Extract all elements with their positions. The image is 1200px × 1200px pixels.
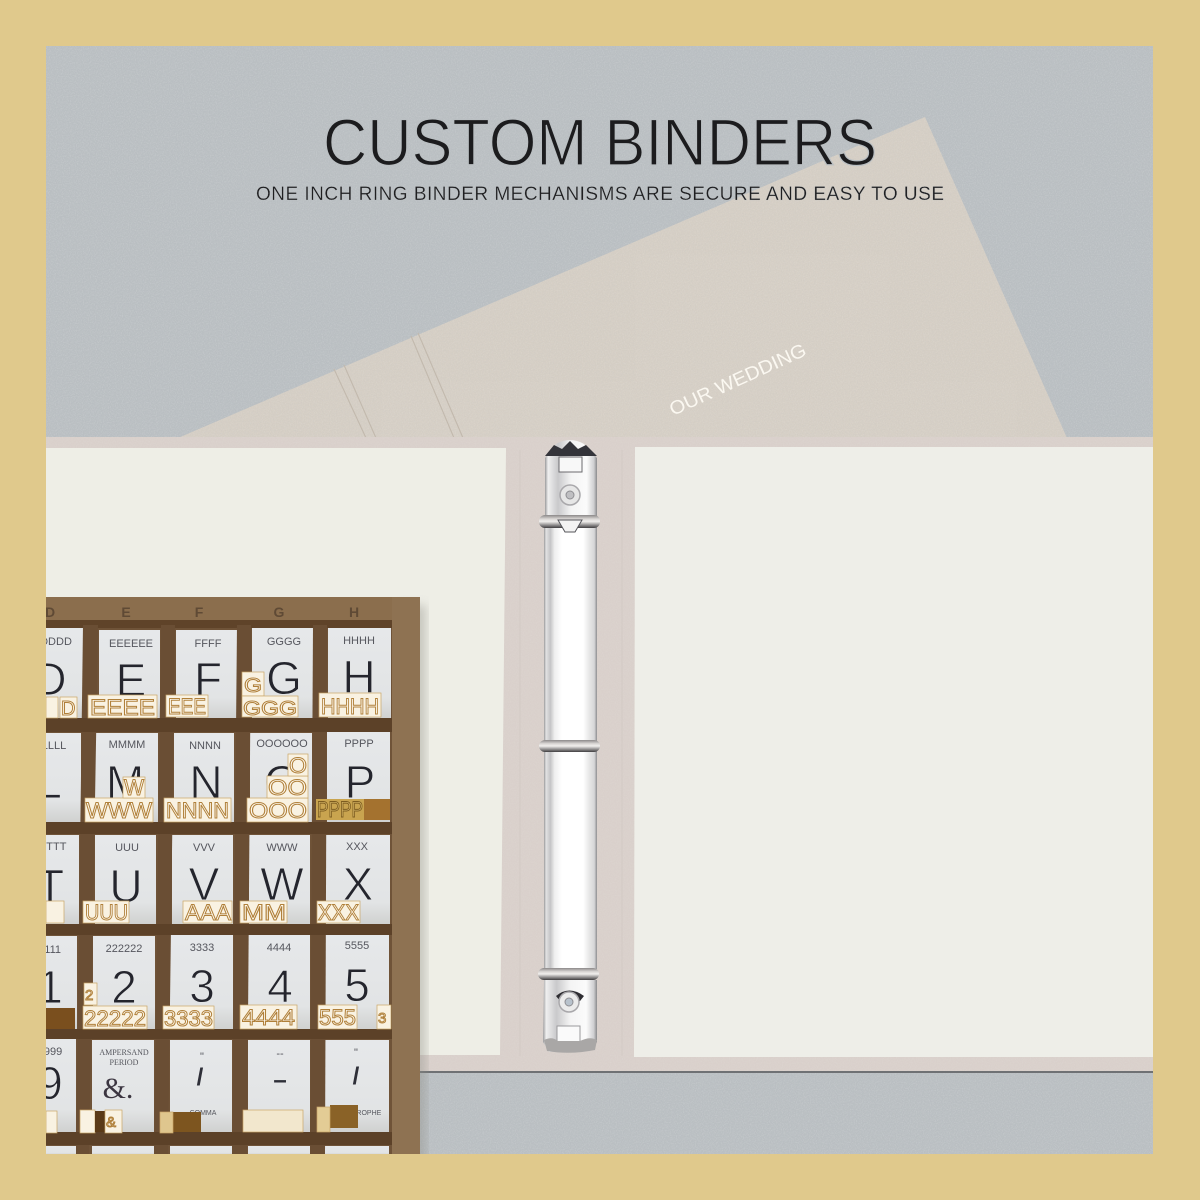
row 3 cells: T U V W X: V xyxy=(189,858,220,910)
top rail with column letters: H xyxy=(349,604,359,620)
row 2 cells: L M N O P: LLLL xyxy=(42,740,66,752)
row 2 cells: L M N O P: MMMM xyxy=(109,739,145,751)
row 4 cells: 1 2 3 4 5: 222222 xyxy=(106,943,142,955)
row 5 cells: 9 ampersand comma hyphen apostrophe: PERIOD xyxy=(110,1058,139,1067)
top rail with column letters: F xyxy=(195,604,204,620)
brass type: row 3: MM xyxy=(242,900,286,925)
row 4 cells: 1 2 3 4 5: 4444 xyxy=(267,942,291,954)
brass type: row 2: OOO xyxy=(249,798,307,823)
row 4 cells: 1 2 3 4 5: 3 xyxy=(189,960,215,1012)
row 3 cells: T U V W X: UUU xyxy=(115,842,139,854)
title: CUSTOM BINDERS xyxy=(323,105,877,179)
row 2 cells: L M N O P: OOOOOO xyxy=(256,738,308,750)
row 5 cells: 9 ampersand comma hyphen apostrophe: " xyxy=(200,1051,204,1063)
row 4 cells: 1 2 3 4 5: 2 xyxy=(111,961,137,1013)
row 1 cells: D E F G H: HHHH xyxy=(343,635,375,647)
row 1 cells: D E F G H: D xyxy=(33,653,67,705)
row 6 cell tops xyxy=(46,1146,389,1154)
row 5 cells: 9 ampersand comma hyphen apostrophe xyxy=(37,1039,389,1133)
brass type: row 4: 3333 xyxy=(164,1006,213,1031)
brass type: row 4 xyxy=(46,983,391,1031)
row 5 cells: 9 ampersand comma hyphen apostrophe: AMPERSAND xyxy=(99,1048,149,1057)
brass type: row 1: EEE xyxy=(168,694,206,719)
row 4 cells: 1 2 3 4 5: 5555 xyxy=(345,940,369,952)
row 3 cells: T U V W X: U xyxy=(109,860,143,912)
row 5 cells: 9 ampersand comma hyphen apostrophe: – xyxy=(273,1067,287,1094)
brass type: row 2: PPPP xyxy=(317,797,363,822)
right rail xyxy=(392,597,420,1157)
left page xyxy=(46,448,506,1055)
row 1 cells: D E F G H: EEEEEE xyxy=(109,638,153,650)
brass type: row 4: 22222 xyxy=(84,1006,146,1031)
row 3 cells: T U V W X xyxy=(36,835,390,925)
top rail with column letters: G xyxy=(274,604,285,620)
open binder linen cover xyxy=(46,437,1153,1073)
top rail with column letters: E xyxy=(121,604,131,620)
row 5 cells: 9 ampersand comma hyphen apostrophe: " xyxy=(354,1047,358,1059)
row 2 cells: L M N O P: NNNN xyxy=(189,740,221,752)
top ring xyxy=(539,515,600,528)
row 2 cells: L M N O P: PPPP xyxy=(344,738,374,750)
brass type: row 2: NNNN xyxy=(166,798,229,823)
brass type: row 4: 3 xyxy=(378,1010,386,1027)
brass type: row 2 xyxy=(85,753,390,823)
vertical dividers xyxy=(76,625,327,1154)
right page xyxy=(634,447,1153,1057)
row 4 cells: 1 2 3 4 5: 1111 xyxy=(39,944,61,956)
tray frame xyxy=(46,628,392,1154)
brass type: row 3: AAA xyxy=(185,900,231,925)
cover foil text: OUR WEDDING: OUR WEDDING xyxy=(666,340,810,421)
brass type: row 2: WWW xyxy=(86,798,152,823)
row 3 cells: T U V W X: WWW xyxy=(266,842,298,854)
wooden letterpress type tray xyxy=(33,597,420,1157)
row 4 cells: 1 2 3 4 5: 5 xyxy=(344,959,370,1011)
brass type: row 1: D xyxy=(61,698,75,720)
subtitle: ONE INCH RING BINDER MECHANISMS ARE SECURE AND EASY TO USE xyxy=(256,184,944,205)
spine grooves xyxy=(334,333,463,438)
bottom ring xyxy=(538,968,599,980)
brass type: row 1: EEEE xyxy=(90,695,155,720)
top rail with column letters: D xyxy=(45,604,55,620)
row 3 cells: T U V W X: VVV xyxy=(193,842,216,854)
brass type: row 2: O xyxy=(289,753,307,778)
row 4 cells: 1 2 3 4 5 xyxy=(37,935,389,1030)
brass type: row 1: GGG xyxy=(243,698,297,720)
brass type: row 5 xyxy=(46,1105,358,1133)
row 3 cells: T U V W X: XXX xyxy=(346,841,369,853)
top rail with column letters xyxy=(45,597,392,628)
bottom plate xyxy=(543,980,597,1052)
row 1 cells: D E F G H: DDDD xyxy=(40,636,72,648)
brass type: row 2: OO xyxy=(268,775,307,800)
ring mechanism xyxy=(538,440,600,1053)
row 5 cells: 9 ampersand comma hyphen apostrophe: 9999 xyxy=(38,1046,62,1058)
brass type: row 1: HHHH xyxy=(321,694,379,719)
row 2 cells: L M N O P: P xyxy=(345,756,375,808)
upper tube xyxy=(544,527,597,741)
row 2 cells: L M N O P xyxy=(36,731,390,823)
brass type: row 4: 4444 xyxy=(242,1005,295,1030)
row 2 cells: L M N O P: M xyxy=(106,756,144,808)
brass type: row 5: & xyxy=(106,1114,116,1131)
brass type: row 3 xyxy=(46,900,360,925)
brass type: row 4: 555 xyxy=(319,1005,356,1030)
lower tube xyxy=(544,751,597,969)
row 1 cells: D E F G H: GGGG xyxy=(267,636,301,648)
row 5 cells: 9 ampersand comma hyphen apostrophe: / xyxy=(197,1064,204,1091)
brass type: row 4: 2 xyxy=(85,987,93,1004)
row 3 cells: T U V W X: X xyxy=(343,858,373,910)
brass type: row 2: W xyxy=(124,775,144,800)
row 4 cells: 1 2 3 4 5: 4 xyxy=(267,960,293,1012)
row 1 cells: D E F G H: G xyxy=(266,652,302,704)
row 1 cells: D E F G H: F xyxy=(194,653,222,705)
row 3 cells: T U V W X: TTTT xyxy=(40,841,67,853)
brass type: row 1: G xyxy=(244,675,262,697)
row 3 cells: T U V W X: W xyxy=(260,858,304,910)
row 2 cells: L M N O P: N xyxy=(189,756,223,808)
row 1 cells: D E F G H: H xyxy=(342,651,376,703)
row 4 cells: 1 2 3 4 5: 1 xyxy=(37,961,63,1013)
row 1 cells: D E F G H: E xyxy=(116,654,146,706)
row 5 cells: 9 ampersand comma hyphen apostrophe: &. xyxy=(103,1072,133,1105)
row 1 cells: D E F G H xyxy=(33,628,391,720)
closed binder cover, angled xyxy=(170,110,1070,440)
tray shadow xyxy=(420,602,429,1154)
row 5 cells: 9 ampersand comma hyphen apostrophe: APOSTROPHE xyxy=(333,1110,382,1117)
row 2 cells: L M N O P: O xyxy=(264,756,300,808)
top plate xyxy=(545,440,597,522)
row 5 cells: 9 ampersand comma hyphen apostrophe: / xyxy=(353,1063,360,1090)
row 1 cells: D E F G H: FFFF xyxy=(195,638,222,650)
row 5 cells: 9 ampersand comma hyphen apostrophe: COMMA xyxy=(190,1110,217,1117)
row 3 cells: T U V W X: T xyxy=(36,860,64,912)
row 5 cells: 9 ampersand comma hyphen apostrophe: 9 xyxy=(37,1057,63,1109)
row 2 cells: L M N O P: L xyxy=(36,756,62,808)
brass type: row 3: XXX xyxy=(318,900,359,925)
brass type: row 3: UUU xyxy=(85,900,128,925)
row 5 cells: 9 ampersand comma hyphen apostrophe: -- xyxy=(276,1048,284,1060)
brass type: row 1 xyxy=(46,672,381,720)
horizontal shelves xyxy=(46,718,392,1145)
middle ring xyxy=(539,740,600,752)
row 4 cells: 1 2 3 4 5: 3333 xyxy=(190,942,214,954)
